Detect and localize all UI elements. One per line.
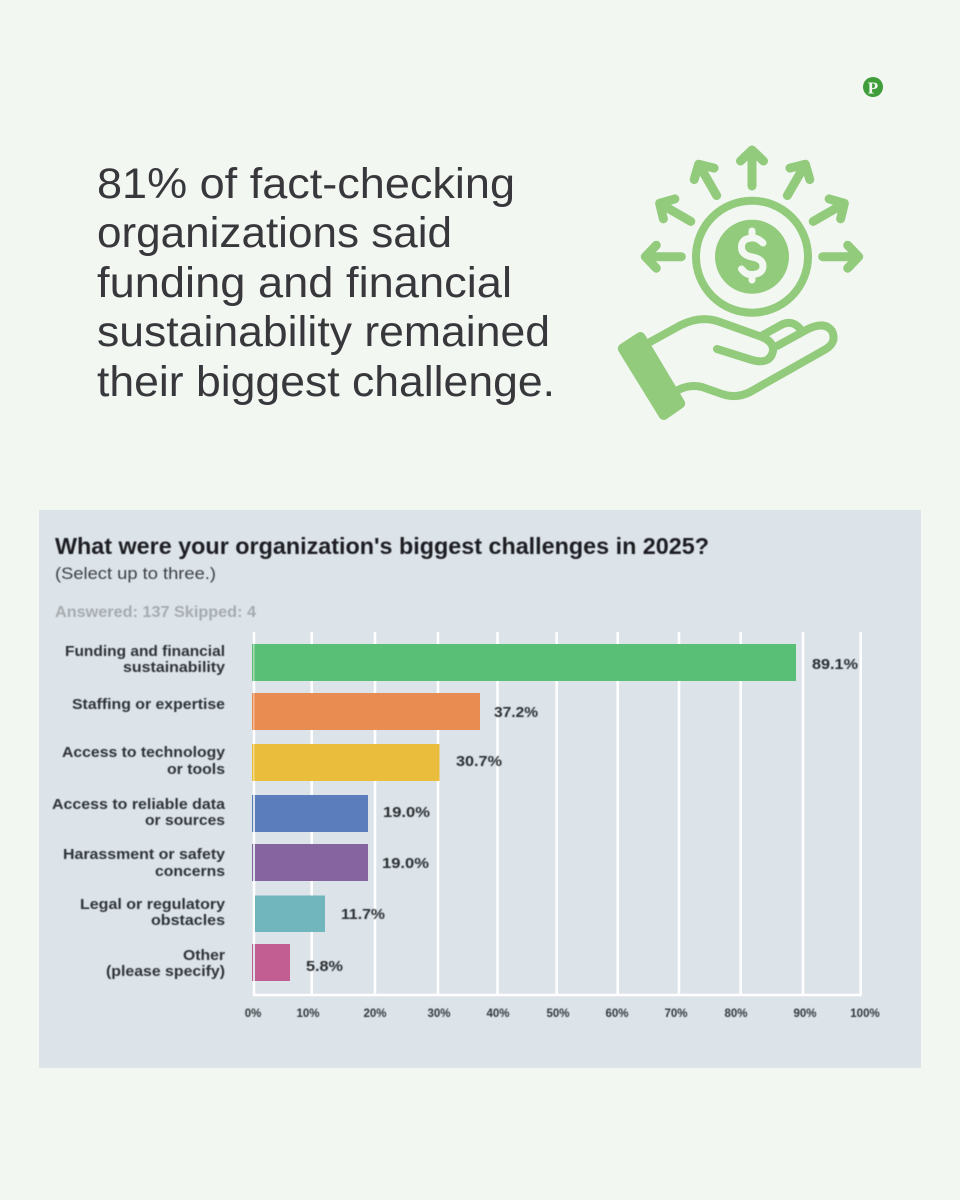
x axis labels: 80% xyxy=(724,1008,748,1020)
category labels: obstacles xyxy=(151,912,225,929)
value labels: 11.7% xyxy=(341,906,385,923)
value labels: 89.1% xyxy=(812,656,858,673)
headline: their biggest challenge. xyxy=(97,359,555,406)
panel: chart xyxy=(39,510,921,1068)
bar: staffing xyxy=(252,693,480,730)
chart subtitle: (Select up to three.) xyxy=(55,564,216,583)
headline: sustainability remained xyxy=(97,309,550,356)
headline: 81% of fact-checking xyxy=(97,161,515,208)
headline: funding and financial xyxy=(97,260,512,307)
logo badge: P xyxy=(868,78,878,98)
category labels xyxy=(52,643,226,980)
category labels: Other xyxy=(183,947,225,964)
logo badge xyxy=(863,77,883,98)
value labels: 30.7% xyxy=(456,753,502,770)
category labels: Access to reliable data xyxy=(52,796,226,813)
headline xyxy=(97,161,555,406)
x axis labels: 60% xyxy=(605,1008,629,1020)
category labels: (please specify) xyxy=(106,963,225,980)
bar: other xyxy=(252,944,290,981)
category labels: Access to technology xyxy=(62,744,226,761)
bar: funding xyxy=(252,644,796,681)
category labels: or sources xyxy=(145,812,225,829)
value labels xyxy=(306,656,858,975)
x axis labels: 90% xyxy=(793,1008,817,1020)
category labels: Funding and financial xyxy=(65,643,225,660)
category labels: Harassment or safety xyxy=(63,846,226,863)
category labels: sustainability xyxy=(123,659,226,676)
x axis labels: 50% xyxy=(546,1008,570,1020)
category labels: Legal or regulatory xyxy=(80,896,226,913)
x axis labels: 40% xyxy=(486,1008,510,1020)
icon: hand xyxy=(623,319,834,415)
bar: harassment xyxy=(252,844,368,881)
category labels: or tools xyxy=(167,761,225,778)
icon: radiating arrows xyxy=(645,150,859,268)
bar: technology xyxy=(252,744,440,781)
bar chart xyxy=(52,632,880,1020)
x axis labels: 0% xyxy=(245,1008,261,1020)
value labels: 37.2% xyxy=(494,704,538,721)
bar: legal xyxy=(255,896,325,932)
x axis labels: 10% xyxy=(296,1008,320,1020)
x axis labels: 20% xyxy=(363,1008,387,1020)
x axis labels: 30% xyxy=(427,1008,451,1020)
x axis labels xyxy=(245,1008,880,1020)
category labels: concerns xyxy=(155,863,225,880)
x axis labels: 100% xyxy=(850,1008,880,1020)
response counts: Answered: 137 Skipped: 4 xyxy=(55,604,256,621)
bar: data xyxy=(252,795,368,832)
icon: hand holding dollar coin with radiating arrows xyxy=(623,150,859,415)
chart title: What were your organization's biggest challenges in 2025? xyxy=(55,533,709,559)
category labels: Staffing or expertise xyxy=(72,696,225,713)
x axis labels: 70% xyxy=(664,1008,688,1020)
headline: organizations said xyxy=(97,210,452,257)
value labels: 19.0% xyxy=(382,855,429,872)
value labels: 19.0% xyxy=(383,804,430,821)
value labels: 5.8% xyxy=(306,958,343,975)
icon: coin xyxy=(696,201,808,313)
